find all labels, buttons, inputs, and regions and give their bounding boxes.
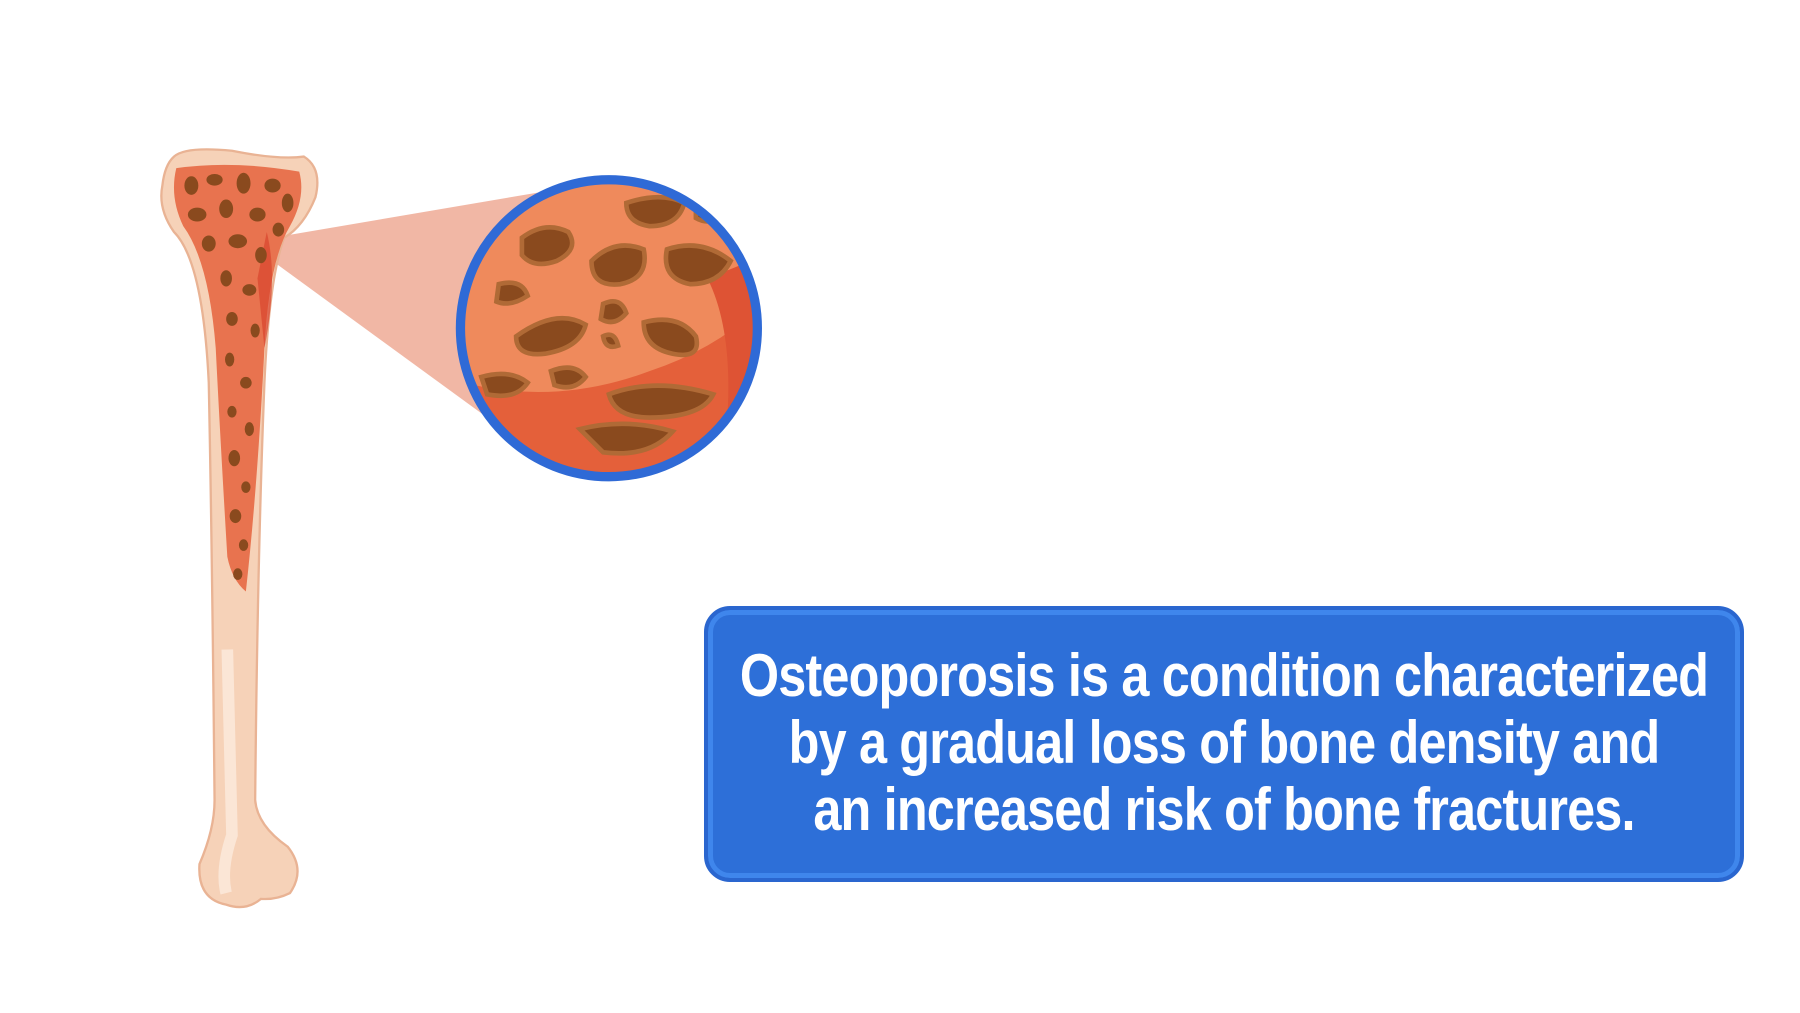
magnification cone — [273, 191, 545, 418]
illustration: bone with magnified view — [160, 148, 762, 908]
magnified circle — [452, 174, 765, 487]
callout: definition text box: an increased risk of bone fractures. — [813, 776, 1635, 843]
bone — [161, 149, 317, 907]
callout: definition text box: Osteoporosis is a condition characterized — [740, 642, 1708, 709]
callout: definition text box — [704, 606, 1744, 882]
callout: definition text box: by a gradual loss of bone density and — [789, 709, 1659, 776]
